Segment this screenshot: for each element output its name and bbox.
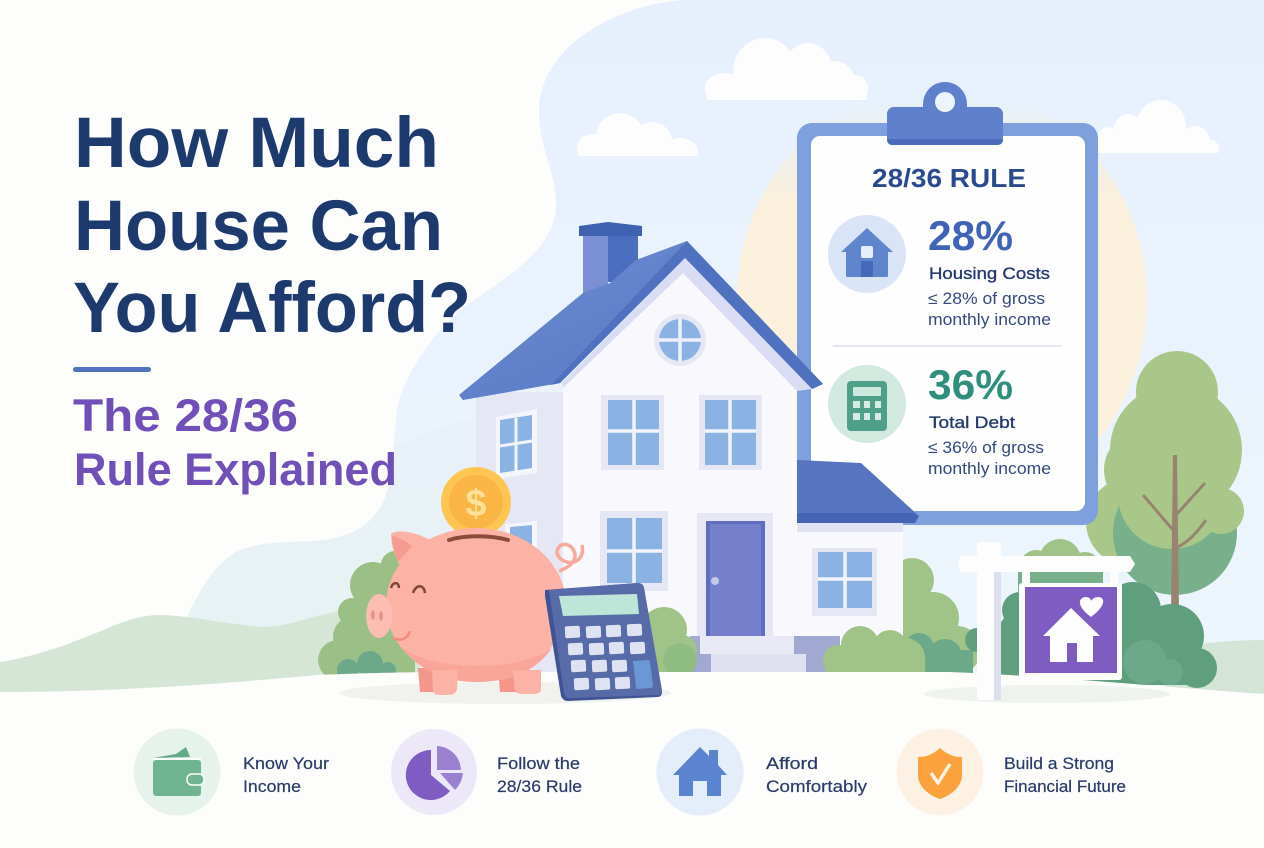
clipboard clip: [887, 82, 1003, 145]
tail: [557, 544, 583, 571]
benefit: follow the rule: [391, 729, 582, 815]
main roof: [459, 241, 823, 400]
white background blob: [0, 0, 682, 680]
body: [386, 528, 566, 682]
calculator keys: [565, 624, 645, 690]
cloud right: [1098, 100, 1219, 153]
benefit: afford comfortably: [656, 728, 868, 816]
label: [497, 755, 582, 796]
house: [459, 222, 919, 673]
door: [697, 513, 773, 636]
side wall: [476, 392, 566, 672]
icon: house: [828, 215, 906, 293]
sign heart icon: [1080, 597, 1103, 617]
icon: house: [656, 728, 744, 816]
left green hill: [0, 611, 420, 700]
icon: pie chart: [391, 729, 477, 815]
title: You Afford?: [73, 269, 471, 348]
title: [73, 104, 471, 348]
label: [1004, 755, 1126, 796]
label: 28/36 Rule: [497, 778, 582, 796]
label: Know Your: [243, 755, 330, 773]
cloud left: [577, 113, 698, 156]
label: [243, 755, 330, 796]
foundation: [690, 636, 840, 672]
housing costs detail: [928, 290, 1051, 329]
title divider: [73, 367, 151, 372]
snout: [366, 594, 392, 638]
icon: wallet: [134, 728, 220, 816]
total debt detail: [928, 439, 1051, 478]
icon: shield: [896, 728, 984, 816]
label: [766, 755, 868, 796]
side window lower: [505, 521, 537, 560]
benefit: build a strong financial future: [896, 728, 1126, 816]
clipboard frame: [797, 123, 1098, 525]
coin: $: [465, 483, 487, 525]
housing costs label: Housing Costs: [929, 264, 1050, 283]
36 percent value: 36%: [928, 361, 1013, 408]
28 percent value: 28%: [928, 212, 1013, 259]
clipboard: [797, 82, 1098, 525]
label: Afford: [766, 755, 818, 773]
side window upper: [496, 409, 537, 479]
peach sun: [737, 83, 1147, 517]
calculator: [545, 583, 662, 701]
title: How Much: [74, 104, 439, 183]
calculator screen: [559, 594, 639, 616]
back legs: [418, 668, 525, 692]
subtitle: Rule Explained: [74, 444, 397, 495]
label: Build a Strong: [1004, 755, 1114, 773]
roof trim: [562, 258, 812, 391]
icon: calculator: [828, 365, 906, 443]
round window: [654, 314, 706, 366]
label: Income: [243, 778, 301, 796]
ear: [391, 532, 430, 564]
ground: [0, 672, 1264, 848]
title: House Can: [74, 187, 443, 266]
total debt detail: monthly income: [928, 460, 1051, 478]
housing costs detail: ≤ 28% of gross: [928, 290, 1045, 308]
28% row: [828, 212, 1051, 329]
housing costs detail: monthly income: [928, 311, 1051, 329]
subtitle: The 28/36: [73, 390, 298, 441]
wing fascia: [797, 523, 903, 532]
chimney: [579, 222, 642, 294]
front legs: [432, 670, 541, 695]
subtitle: [73, 390, 397, 495]
ground shadow left: [339, 682, 671, 704]
lower window left: [600, 511, 668, 591]
coin: [441, 467, 511, 537]
wing roof: [797, 460, 919, 523]
benefit: know your income: [134, 728, 330, 816]
total debt label: Total Debt: [929, 413, 1015, 432]
clipboard paper: [811, 136, 1085, 511]
label: Comfortably: [766, 778, 868, 796]
bush behind piggy bank: [318, 551, 415, 681]
bush front of house: [641, 607, 925, 678]
real estate sign: [958, 542, 1135, 700]
upper window left: [601, 395, 664, 470]
wing wall: [797, 523, 903, 673]
front wall: [563, 272, 797, 672]
sign house icon: [1043, 608, 1100, 662]
ground shadow right: [924, 685, 1170, 703]
piggy bank: [366, 467, 583, 695]
pale blue hill behind house: [180, 420, 540, 680]
tree: [1086, 351, 1244, 612]
clipboard title: 28/36 RULE: [872, 163, 1026, 193]
coin slot: [449, 536, 508, 540]
eyes: [391, 583, 425, 593]
bushes right of house: [890, 558, 989, 674]
cloud top: [705, 38, 868, 106]
wing window: [812, 548, 877, 616]
label: Financial Future: [1004, 778, 1126, 796]
sign board: [1019, 583, 1122, 680]
label: Follow the: [497, 755, 580, 773]
front steps: [700, 636, 806, 672]
36% row: [828, 361, 1051, 478]
sign post: [977, 542, 1001, 700]
smile: [393, 631, 410, 640]
sign crossbar: [958, 556, 1135, 572]
bushes behind yard sign: [996, 539, 1217, 688]
total debt detail: ≤ 36% of gross: [928, 439, 1044, 457]
right green hill: [1165, 640, 1264, 700]
upper window right: [699, 395, 762, 470]
